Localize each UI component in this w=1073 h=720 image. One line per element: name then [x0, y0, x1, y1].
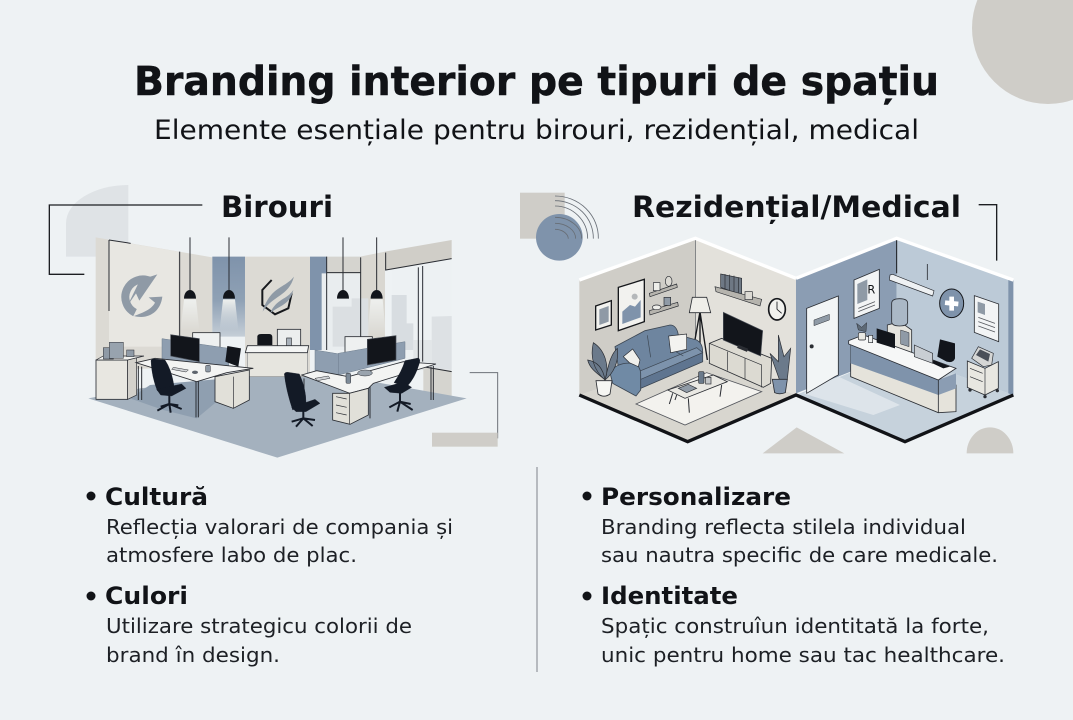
- bullet: Personalizare: Personalizare: [601, 483, 791, 511]
- bracket line: [49, 205, 202, 274]
- decorative circle top right: [972, 0, 1073, 104]
- subtitle: Elemente esențiale pentru birouri, rezidențial, medical: [154, 115, 919, 146]
- reception counter: [849, 323, 956, 413]
- poster Rx: [854, 269, 879, 318]
- black floor edge: [579, 395, 1013, 442]
- bullet: Culori: brand în design.: [106, 643, 280, 667]
- cabinet: [96, 342, 144, 399]
- bullet: Identitate: Spațic construîun identitată la forte,: [601, 614, 989, 638]
- bullet: Identitate: Identitate: [601, 582, 738, 610]
- illustration: residential and medical rooms: [520, 193, 1013, 453]
- small shelves: [649, 276, 678, 315]
- bullet: Personalizare: [582, 483, 998, 567]
- ceiling light: [889, 264, 934, 296]
- pendant lamps: [181, 237, 386, 337]
- poster Rx: R: [867, 282, 875, 296]
- right workstation: [302, 336, 436, 424]
- bullet: Culori: Culori: [105, 582, 188, 610]
- clock: [769, 299, 785, 320]
- floor lamp: [689, 297, 711, 360]
- chair center: [284, 372, 320, 427]
- illustration: office: [49, 185, 498, 458]
- decorative triangle: [763, 427, 844, 453]
- decorative square and circle with arcs: [520, 193, 598, 261]
- bullet: Identitate: [582, 582, 1005, 667]
- bullet: Cultură: Reflecția valorari de compania și: [106, 515, 453, 539]
- bullet: Identitate: unic pentru home sau tac healthcare.: [601, 643, 1005, 667]
- right column: Rezidențial/Medical: [582, 483, 1005, 667]
- column divider: [536, 467, 538, 672]
- bullet: Culori: [86, 582, 412, 667]
- heading: Rezidențial/Medical: Rezidențial/Medical: [632, 190, 961, 224]
- reception desk: [245, 329, 309, 377]
- plant right: [770, 335, 791, 394]
- floor shadow: [130, 377, 247, 418]
- decorative half circle: [967, 427, 1013, 453]
- medical cart: [967, 347, 999, 398]
- bullet: Personalizare: Branding reflecta stilela individual: [601, 515, 966, 539]
- bullet: Personalizare: sau nautra specific de care medicale.: [601, 543, 998, 567]
- office walls: [96, 237, 452, 397]
- logo back wall: [262, 277, 294, 314]
- plant left: [588, 343, 618, 396]
- chair left: [151, 359, 186, 413]
- wall frames: [596, 279, 644, 331]
- living room: [579, 238, 796, 442]
- decorative half circle: [66, 185, 128, 257]
- bullet: Cultură: Cultură: [105, 483, 208, 511]
- chair right: [384, 358, 420, 412]
- medical cross sign: [940, 289, 964, 318]
- logo left wall: [125, 274, 162, 317]
- bullet: Cultură: [86, 483, 453, 567]
- bullet: Cultură: atmosfere labo de plac.: [106, 543, 357, 567]
- water cooler: [887, 299, 912, 353]
- bullet: Culori: Utilizare strategicu colorii de: [106, 614, 412, 638]
- medical room: [796, 238, 1013, 442]
- bracket line: [979, 205, 997, 261]
- book shelf: [715, 274, 762, 306]
- tv and console: [709, 312, 772, 387]
- left column: Birouri: [86, 483, 453, 667]
- title: Branding interior pe tipuri de spațiu: [134, 59, 939, 105]
- notice poster: [974, 296, 999, 342]
- sofa: [610, 325, 703, 396]
- left workstation: [136, 333, 253, 417]
- coffee table: [668, 372, 727, 413]
- floor: [88, 372, 467, 458]
- heading: Birouri: Birouri: [221, 190, 333, 224]
- rug: [636, 373, 762, 425]
- door: [807, 296, 838, 393]
- bracket and bar bottom right: [432, 373, 498, 447]
